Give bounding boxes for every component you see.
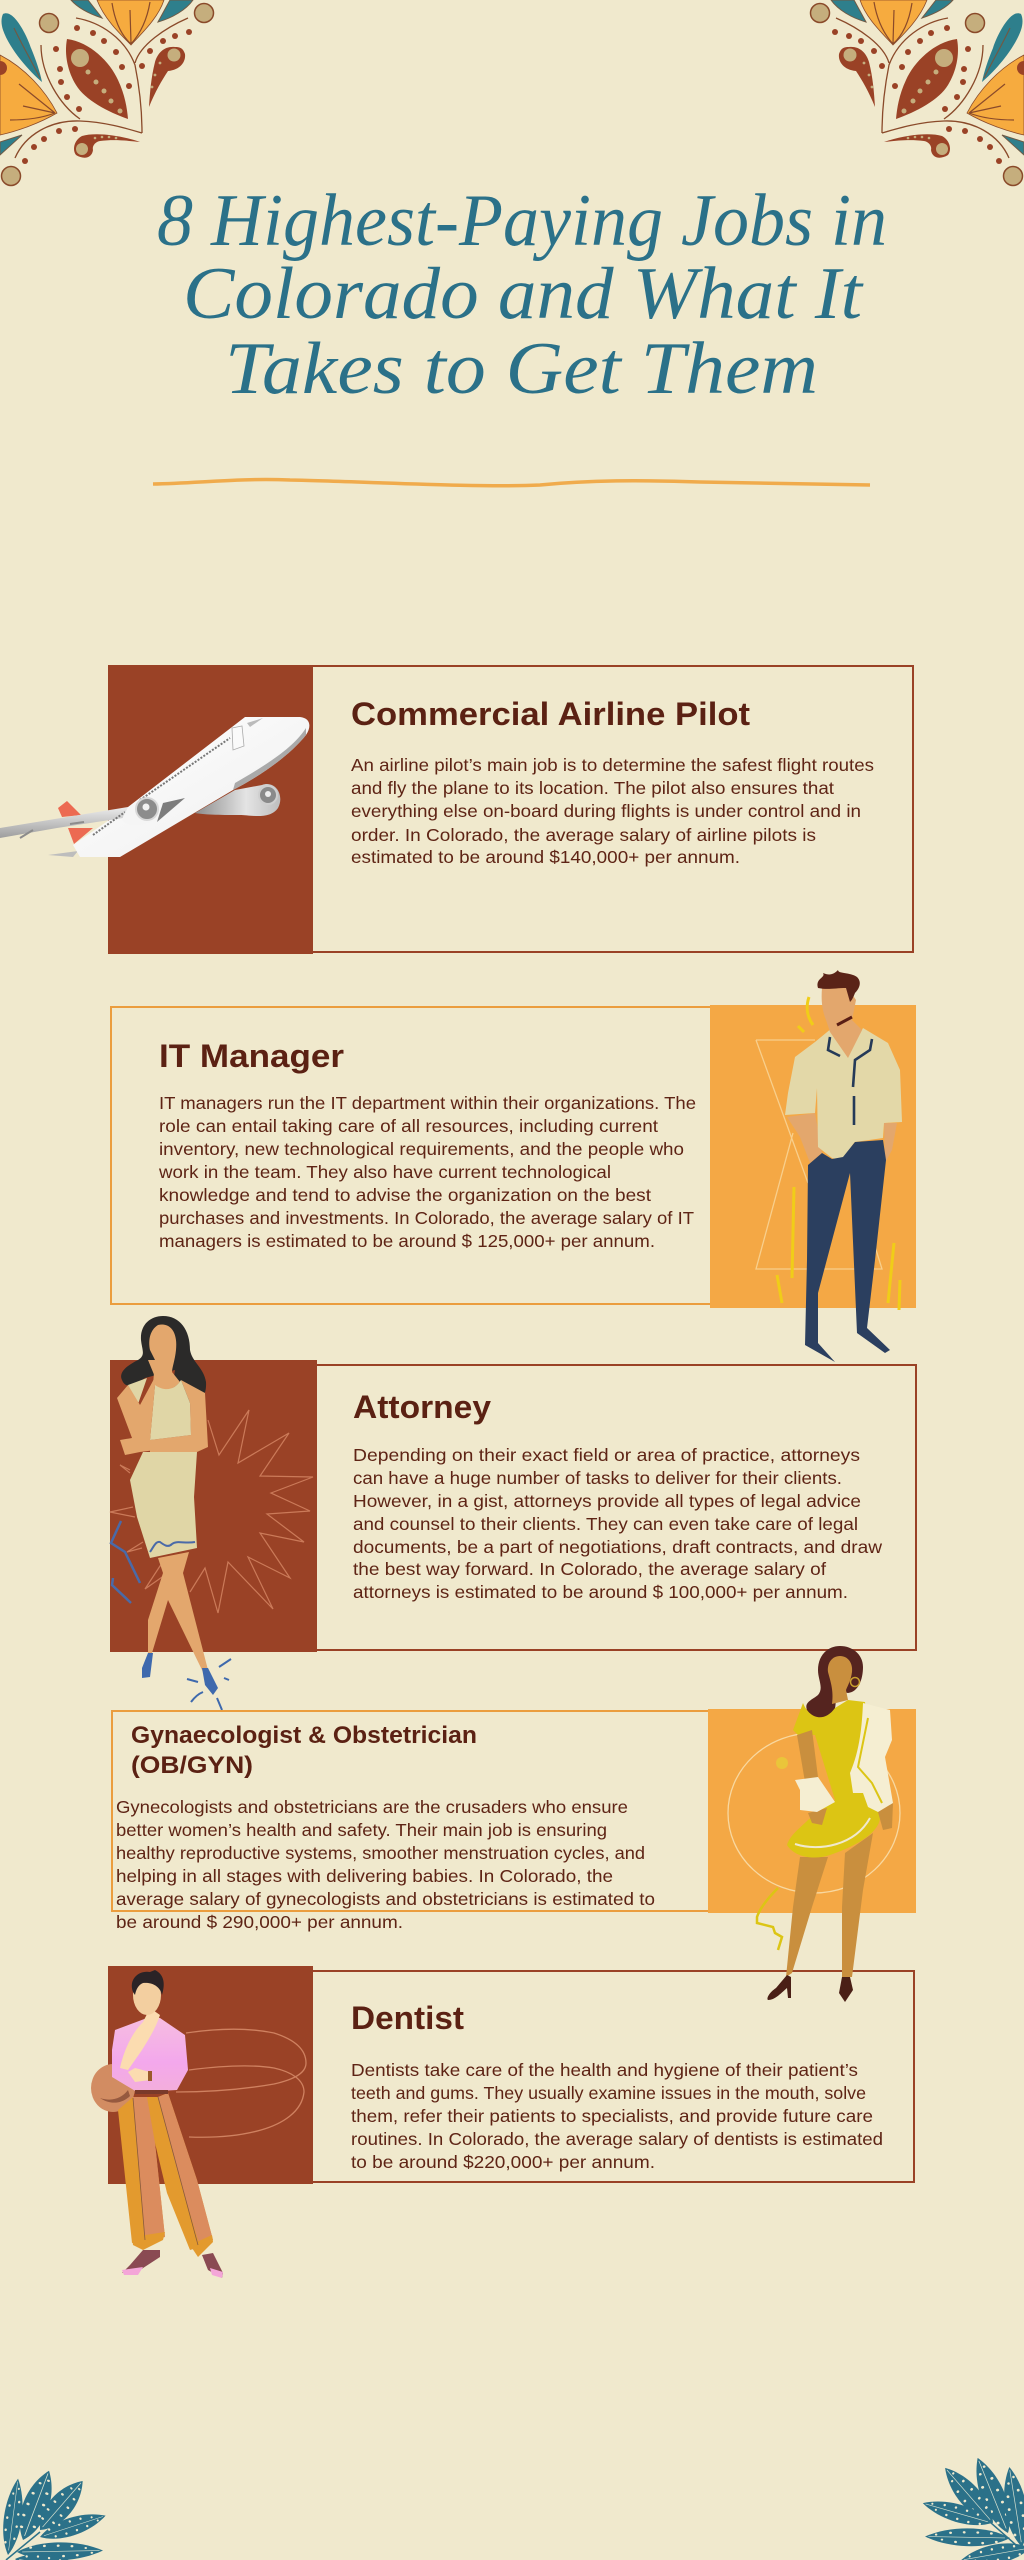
text block (158, 1093, 696, 1251)
text block: attorneys is estimated to be around $ 100,000+ per annum. (353, 1582, 848, 1602)
text block: the best way forward. In Colorado, the average salary of (353, 1559, 826, 1579)
icon: woman in yellow dress (757, 1646, 893, 2002)
text block: estimated to be around $140,000+ per annum. (351, 847, 740, 867)
text block: helping in all stages with delivering babies. In Colorado, the (116, 1866, 613, 1886)
text block: order. In Colorado, the average salary of airline pilots is (351, 825, 816, 845)
text block: Gynecologists and obstetricians are the crusaders who ensure (116, 1797, 628, 1817)
icon: airplane (0, 717, 309, 857)
ornament: top-left floral corner (0, 0, 214, 186)
text block: purchases and investments. In Colorado, the average salary of IT (159, 1208, 694, 1228)
icon: man in shirt (777, 970, 902, 1362)
panel: dentist (91, 1966, 914, 2278)
panel: IT manager (111, 970, 916, 1362)
panel: gynaecologist and obstetrician (112, 1646, 916, 2002)
text block: work in the team. They also have current technological (158, 1162, 611, 1182)
icon: bottom-left leaves (0, 2466, 108, 2560)
text block (353, 1445, 882, 1602)
heading: IT Manager (159, 1038, 344, 1074)
text block: Dentists take care of the health and hygiene of their patient’s (351, 2060, 858, 2080)
heading: Commercial Airline Pilot (351, 696, 750, 732)
heading (131, 1722, 477, 1779)
text block: can have a huge number of tasks to deliver for their clients. (353, 1468, 842, 1488)
title: 8 Highest-Paying Jobs in (157, 180, 887, 262)
text block: IT managers run the IT department within their organizations. The (159, 1093, 696, 1113)
title (157, 180, 887, 410)
text block: average salary of gynecologists and obstetricians is estimated to (116, 1889, 655, 1909)
icon: man with hat (91, 1970, 223, 2278)
heading: Dentist (351, 2000, 464, 2036)
text block: However, in a gist, attorneys provide all types of legal advice (353, 1491, 861, 1511)
text block (116, 1797, 655, 1932)
text block: and counsel to their clients. They can even take care of legal (353, 1514, 858, 1534)
title: Takes to Get Them (225, 328, 818, 410)
ornament: top-right floral corner (810, 0, 1024, 186)
icon: woman in cream dress (111, 1316, 231, 1710)
panel: attorney (110, 1316, 916, 1710)
heading: Gynaecologist & Obstetrician (131, 1722, 477, 1749)
text block: role can entail taking care of all resources, including current (159, 1116, 658, 1136)
title: Colorado and What It (183, 253, 865, 335)
text block: them, refer their patients to specialists, and provide future care (351, 2106, 873, 2126)
text block: to be around $220,000+ per annum. (351, 2152, 655, 2172)
text block (351, 755, 874, 867)
icon: bottom-right leaves (920, 2454, 1024, 2560)
panel: commercial airline pilot (0, 665, 913, 954)
text block: teeth and gums. They usually examine issues in the mouth, solve (351, 2083, 866, 2103)
text block: documents, be a part of negotiations, draft contracts, and draw (353, 1537, 882, 1557)
text block: Depending on their exact field or area of practice, attorneys (353, 1445, 860, 1465)
text block (351, 2060, 883, 2172)
text block: better women’s health and safety. Their main job is ensuring (116, 1820, 607, 1840)
text block: everything else on-board during flights is under control and in (351, 801, 861, 821)
text block: routines. In Colorado, the average salary of dentists is estimated (351, 2129, 883, 2149)
text block: managers is estimated to be around $ 125,000+ per annum. (159, 1231, 655, 1251)
text block: inventory, new technological requirements, and the people who (159, 1139, 684, 1159)
text block: be around $ 290,000+ per annum. (116, 1912, 403, 1932)
text block: and fly the plane to its location. The pilot also ensures that (351, 778, 834, 798)
heading: (OB/GYN) (131, 1752, 253, 1779)
text block: knowledge and tend to advise the organization on the best (159, 1185, 651, 1205)
title underline (153, 480, 870, 486)
text block: healthy reproductive systems, smoother menstruation cycles, and (116, 1843, 645, 1863)
heading: Attorney (353, 1389, 491, 1425)
text block: An airline pilot’s main job is to determine the safest flight routes (351, 755, 874, 775)
